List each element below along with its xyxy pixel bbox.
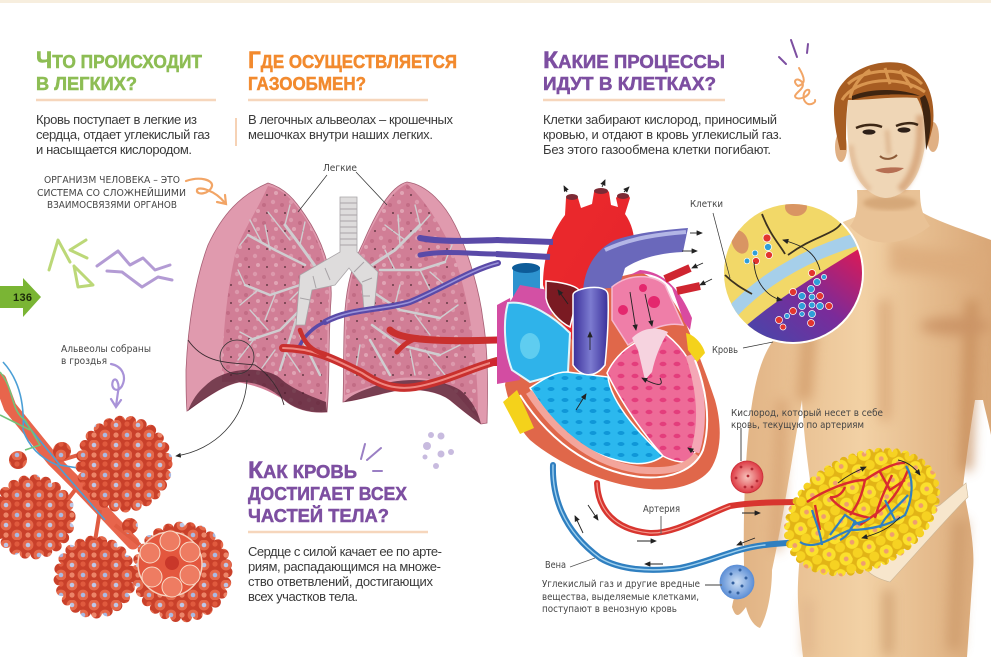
pulmonary trunk highlight [605,232,686,250]
note: organism: СИСТЕМА СО СЛОЖНЕЙШИМИ [37,187,186,199]
label: vein: Вена [545,560,566,571]
label: carbon dioxide [542,579,700,615]
heart flow arrows [558,290,694,452]
figure: body shading [776,240,990,655]
magenta fold [510,285,552,315]
icon: purple curl arrow [111,364,124,407]
figure: cheek shading [851,115,920,190]
text: gas exchange [248,112,454,142]
human figure [732,62,991,657]
left atrium spots [618,284,660,315]
cell background [724,204,862,342]
lungs label leaders [298,172,387,212]
right atrium chamber [505,303,570,382]
label: blood leader [743,342,773,348]
figure: eyes [862,127,910,135]
figure: nose [880,155,897,159]
text: lungs: и насыщается кислородом. [36,142,192,157]
figure: ears [835,122,939,162]
top paper strip [0,0,991,3]
outflow stubs right [665,268,700,291]
label: blood: Кровь [712,345,738,356]
heading: blood [248,457,407,526]
doodle: purple dashes [779,40,808,64]
left atrium cap [620,270,692,330]
text: gas exchange: мешочках внутри наших легких. [248,127,433,142]
label: carbon dioxide: Углекислый газ и другие вредные [542,579,700,590]
label: oxygen [731,408,883,431]
white lining [520,360,707,478]
text: cells: Клетки забирают кислород, приносимый [543,112,777,127]
yellow fat right [686,333,705,362]
blood lumen [747,250,862,342]
label: oxygen: кровь, текущую по артериям [731,420,864,431]
figure: neck [850,190,930,243]
valve area [632,329,668,380]
text: cells [543,112,782,157]
right lung inner section [345,184,478,418]
cell magnified circle [724,204,864,344]
wall muscle bottom [529,392,697,471]
main vein [553,465,800,570]
tissue with capillaries [767,427,957,597]
column divider [235,118,237,146]
doodle: purple dashes [361,444,382,471]
heading: gas exchange: ГДЕ ОСУЩЕСТВЛЯЕТСЯ [248,47,457,74]
right lung base shadow [344,380,481,424]
central pulmonary tube [573,287,608,375]
airway trunk [0,380,133,543]
label: cells leader [713,213,730,278]
arrows along vessels [575,505,760,564]
page number tab [0,278,41,317]
left lung inner section [222,186,329,411]
figure: hair shadow [852,90,931,150]
left atrium [612,277,683,345]
outflow stubs left [490,340,497,363]
figure: mouth [875,167,904,173]
label: carbon dioxide: поступают в венозную кровь [542,604,677,615]
pulmonary arteries red [283,330,497,388]
heart outer wall [505,272,720,489]
heart [490,180,720,489]
magnifier contents [724,204,862,342]
right bronchial tree [355,205,460,375]
molecules red [752,234,832,330]
left ventricle muscle strip [690,355,700,452]
note: organism [37,175,186,211]
label: cells: Клетки [690,199,723,210]
text: lungs: Кровь поступает в легкие из [36,112,197,127]
aorta arch [543,189,634,345]
cluster upper [81,421,167,507]
green vessels [0,372,40,450]
oxygen blood cell [731,461,763,493]
heading: cells [543,47,725,94]
heading underline [543,99,725,101]
small alveoli [9,442,138,534]
doodle: purple dots [422,432,454,469]
left pulmonary veins at heart [496,240,553,257]
label: carbon dioxide: вещества, выделяемые клетками, [542,592,699,603]
heading underline [248,531,428,533]
text: blood: риям, распадающимся на множе- [248,559,441,574]
heading: cells: КАКИЕ ПРОЦЕССЫ [543,47,725,74]
left ventricle [607,330,703,462]
heading: blood: ЧАСТЕЙ ТЕЛА? [248,505,389,526]
figure: underwear [805,483,968,582]
lungs [186,182,498,424]
text: cells: Без этого газообмена клетки погибают. [543,142,771,157]
figure: neck shadow [863,196,917,210]
nucleus left [732,230,748,254]
fossa [520,333,540,359]
left bronchial tree [238,205,320,375]
doodle: orange curl [795,68,815,104]
figure: torso and arms [732,205,991,657]
cluster left [0,480,70,554]
doodle: purple zigzags [97,251,172,287]
heading: gas exchange [248,47,457,94]
cell membrane lines [725,214,842,294]
magnifier backdrop [722,202,864,344]
label: artery: Артерия [643,504,680,515]
vessels on trunk [3,362,110,520]
text: blood: всех участков тела. [248,589,358,604]
note: organism: ОРГАНИЗМ ЧЕЛОВЕКА – ЭТО [44,175,180,186]
right lung [343,182,488,424]
page number: 136 [13,292,32,304]
vein highlight [553,465,765,570]
left lung [186,183,331,412]
heading: lungs [36,47,202,94]
nucleus top [785,204,807,216]
artery leader [660,516,662,534]
text: lungs: сердца, отдает углекислый газ [36,127,210,142]
text: lungs [36,112,210,157]
superior vena cava [513,267,540,305]
arrow from lung to alveoli [176,380,247,456]
figure: face [847,94,927,198]
carbon dioxide blood cell [720,565,754,599]
arteries and veins to tissue [553,465,807,570]
capillaries blue [800,466,912,545]
main artery [597,483,807,533]
text: cells: кровью, и отдают в кровь углекислый газ. [543,127,782,142]
text: gas exchange: В легочных альвеолах – крошечных [248,112,454,127]
alveoli illustration [0,362,227,617]
yellow fat left [503,390,534,434]
doodle: green triangles [49,240,93,287]
tissue arrows [838,460,920,538]
co2 leader [705,584,722,586]
label: alveoli clusters [61,344,151,367]
figure: hair highlight [842,68,925,100]
text: blood [248,544,442,604]
heart outflow arrows [564,180,712,285]
icon: orange curl arrow [186,179,226,204]
trachea [296,197,378,325]
heading: cells: ИДУТ В КЛЕТКАХ? [543,74,716,94]
heading: blood: КАК КРОВЬ [248,457,357,484]
label: alveoli clusters: в гроздья [61,356,107,367]
vena cava opening [512,263,540,273]
heading: blood: ДОСТИГАЕТ ВСЕХ [248,484,407,504]
transfer arrows [754,240,820,300]
tissue cell mass [767,427,957,597]
figure: eyebrows [856,123,918,128]
heading underline [248,99,428,101]
cluster lower [59,541,131,613]
heading: lungs: В ЛЕГКИХ? [36,74,137,94]
molecules blue [744,244,827,319]
pulmonary artery [583,228,688,290]
label: oxygen: Кислород, который несет в себе [731,408,883,419]
heading: lungs: ЧТО ПРОИСХОДИТ [36,47,202,74]
vein leader [570,558,595,567]
aorta vessel ends [566,188,629,200]
capillaries red [807,463,908,530]
cluster right [137,527,227,617]
cut-open cluster [138,531,202,597]
highlighted alveoli ring [220,340,254,374]
right atrium outer [497,298,520,384]
pulmonary veins purple [300,238,498,345]
aortic chamber [546,281,579,327]
figure: hair [834,62,933,150]
lobe fissure line [188,340,284,405]
artery highlight [597,483,730,533]
branches [55,445,140,560]
heading: gas exchange: ГАЗООБМЕН? [248,74,366,94]
text: blood: Сердце с силой качает ее по арте- [248,544,442,559]
endothelium band [731,234,856,315]
label: lungs: Легкие [323,163,357,174]
left lung base shadow [188,370,327,412]
right ventricle [530,372,663,464]
label: alveoli clusters: Альвеолы собраны [61,344,151,355]
note: organism: ВЗАИМОСВЯЗЯМИ ОРГАНОВ [47,200,177,211]
heading underline [36,99,216,101]
text: blood: ство ответвлений, достигающих [248,574,434,589]
oxygen leader [740,428,742,461]
